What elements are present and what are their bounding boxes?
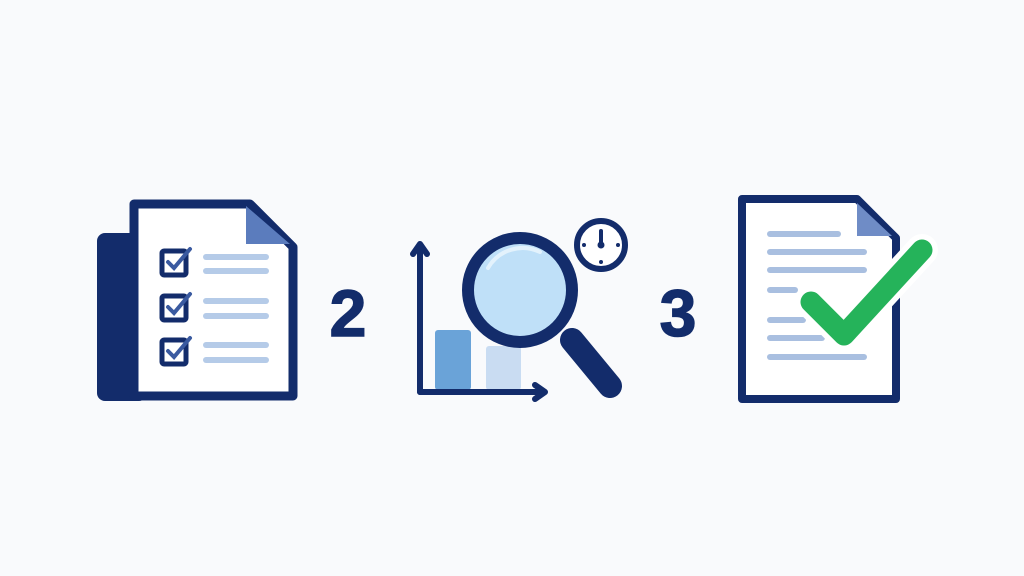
checkbox 1 [162, 249, 190, 275]
icon: checklist document [97, 204, 293, 401]
checkbox 2 [162, 294, 190, 320]
icon: chart with magnifier and clock [413, 221, 625, 399]
green check mark [811, 250, 922, 335]
icon: approved document [742, 199, 922, 399]
magnifier [468, 238, 610, 386]
step number 3: 3 [660, 276, 696, 350]
checkbox 3 [162, 338, 190, 364]
clock [577, 221, 625, 269]
step number 2: 2 [330, 276, 366, 350]
bar chart [413, 244, 545, 399]
